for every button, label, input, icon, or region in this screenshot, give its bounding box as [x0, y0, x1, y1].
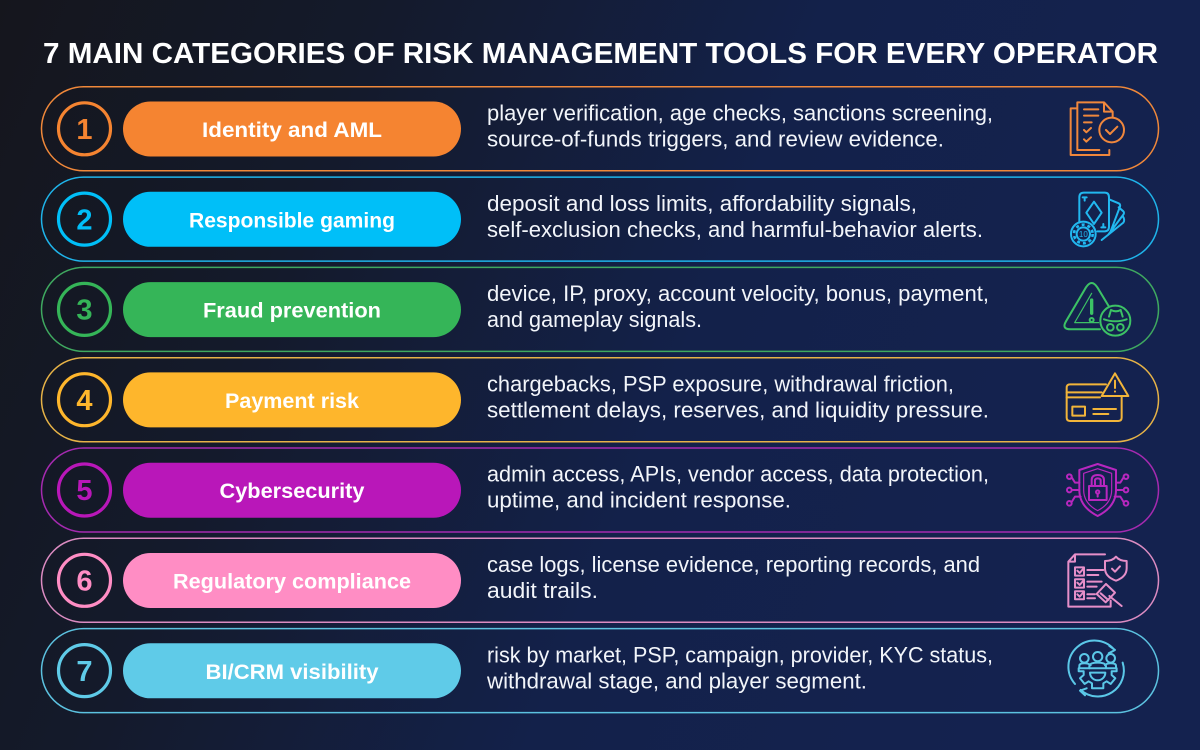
number badge 6: [58, 554, 110, 606]
panel: row 7 BI/CRM visibility: [42, 629, 1158, 713]
description: withdrawal stage, and player segment.: [486, 668, 867, 693]
number badge 4: 4: [76, 385, 93, 417]
number badge 6: 6: [76, 566, 93, 598]
row outline: [42, 629, 1158, 713]
number badge 3: [58, 283, 110, 335]
panel: row 1 identity and AML: [42, 87, 1158, 171]
icon: warning triangle and spy: [1064, 283, 1130, 336]
icon: cards and chip: 10: [1079, 230, 1088, 239]
panel: row 4 payment risk: [42, 358, 1158, 442]
description: [487, 281, 989, 332]
row outline: [42, 87, 1158, 171]
icon: documents with check: [1071, 102, 1124, 155]
row outline: [42, 358, 1158, 442]
category pill: Identity and AML: [202, 119, 382, 142]
icon: shield with lock: [1067, 464, 1128, 516]
category pill: [123, 192, 461, 247]
number badge 5: [58, 464, 110, 516]
category pill: [123, 282, 461, 337]
row outline: [42, 538, 1158, 622]
number badge 2: 2: [76, 204, 93, 236]
category pill: [123, 553, 461, 608]
category pill: Regulatory compliance: [173, 570, 411, 594]
description: deposit and loss limits, affordability signals,: [487, 191, 917, 216]
number badge 3: 3: [76, 295, 93, 327]
number badge 7: [58, 645, 110, 697]
description: [487, 552, 980, 603]
icon: team, gear and cycle arrows: [1068, 641, 1124, 696]
row outline: [42, 448, 1158, 532]
description: [486, 642, 993, 693]
description: [487, 191, 983, 242]
panel: row 3 fraud prevention: [42, 267, 1158, 351]
description: risk by market, PSP, campaign, provider, KYC status,: [487, 642, 993, 667]
icon: card with warning: [1067, 373, 1128, 421]
category pill: [123, 643, 461, 698]
category pill: Cybersecurity: [220, 480, 365, 503]
description: [487, 100, 993, 152]
number badge 5: 5: [76, 475, 93, 507]
description: case logs, license evidence, reporting records, and: [487, 552, 980, 577]
title: 7 MAIN CATEGORIES OF RISK MANAGEMENT TOOLS FOR EVERY OPERATOR: [43, 38, 1158, 70]
description: uptime, and incident response.: [487, 488, 791, 513]
category pill: [123, 372, 461, 427]
description: [487, 462, 989, 513]
panel: row 6 regulatory compliance: [42, 538, 1158, 622]
description: settlement delays, reserves, and liquidity pressure.: [487, 397, 989, 422]
number badge 7: 7: [76, 656, 93, 688]
icon: cards and chip: [1071, 193, 1124, 246]
description: and gameplay signals.: [487, 307, 702, 332]
number badge 1: 1: [76, 114, 93, 146]
category pill: [123, 463, 461, 518]
description: [487, 371, 989, 422]
panel: row 2 responsible gaming: [42, 177, 1158, 261]
icon: checklist, shield and gavel: [1068, 554, 1127, 607]
description: device, IP, proxy, account velocity, bonus, payment,: [487, 281, 989, 306]
category pill: Fraud prevention: [203, 300, 381, 323]
category pill: Payment risk: [225, 390, 359, 413]
description: chargebacks, PSP exposure, withdrawal friction,: [487, 371, 954, 396]
description: source-of-funds triggers, and review evidence.: [487, 126, 944, 152]
category pill: BI/CRM visibility: [206, 661, 379, 684]
row outline: [42, 267, 1158, 351]
description: admin access, APIs, vendor access, data protection,: [487, 462, 989, 487]
description: self-exclusion checks, and harmful-behavior alerts.: [487, 217, 983, 242]
description: audit trails.: [487, 578, 598, 603]
number badge 4: [58, 374, 110, 426]
number badge 1: [58, 103, 110, 155]
category pill: Responsible gaming: [189, 209, 395, 232]
category pill: [123, 102, 461, 156]
panel: row 5 cybersecurity: [42, 448, 1158, 532]
description: player verification, age checks, sanctions screening,: [487, 100, 993, 126]
number badge 2: [58, 193, 110, 245]
row outline: [42, 177, 1158, 261]
